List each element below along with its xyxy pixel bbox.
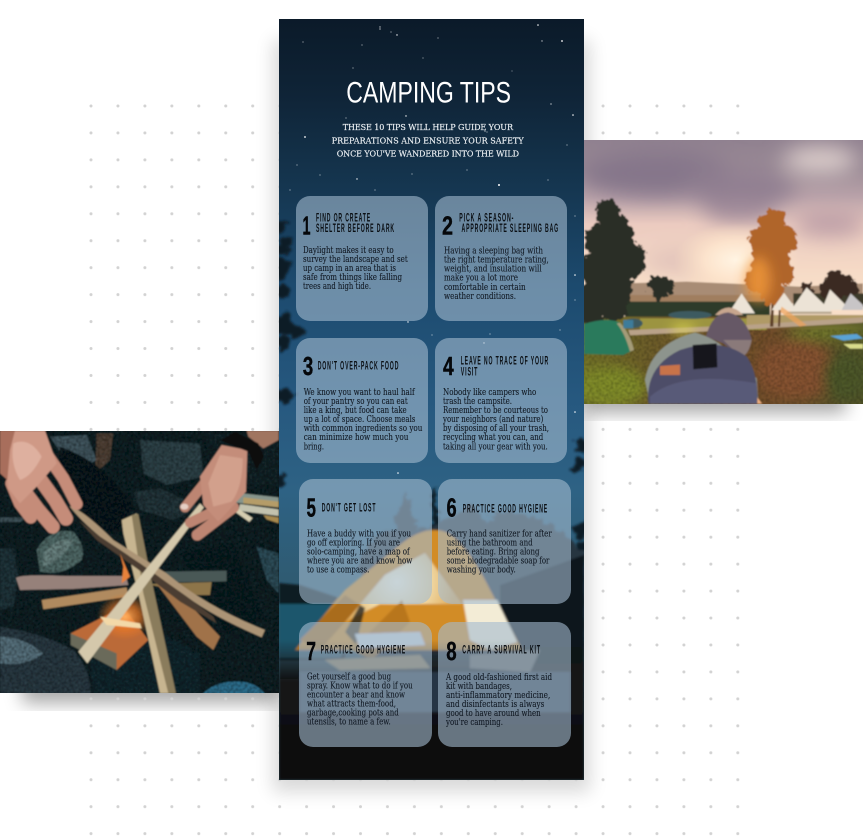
background scene: trees and lit tent: [271, 218, 590, 780]
tip card 5: to use a compass.: [307, 565, 369, 576]
tip card 1: trees and high tide.: [303, 281, 371, 292]
tip card 3: like a king, but food can take: [304, 405, 407, 416]
tip card 7: garbage,cooking pots and: [307, 708, 399, 719]
tip card 8: A good old-fashioned first aid: [445, 672, 552, 683]
tip card 5: where you are and know how: [307, 556, 412, 567]
rocks: [50, 434, 96, 464]
tip card 1: FIND OR CREATE: [316, 213, 371, 225]
tip card 2: Having a sleeping bag with: [444, 246, 543, 256]
tip card 2: [435, 196, 567, 321]
tip card 5: [299, 479, 432, 604]
tip card 3: can minimize how much you: [304, 432, 408, 443]
tip card 7: what attracts them-food,: [307, 699, 396, 710]
tip card 8: CARRY A SURVIVAL KIT: [462, 645, 541, 657]
tip card 7: [299, 622, 432, 747]
tip card 2: make you a lot more: [444, 273, 518, 284]
tip card 2: weight, and insulation will: [444, 264, 542, 275]
right hand: [185, 478, 233, 535]
sticks: [42, 587, 128, 609]
poster panel: [271, 19, 590, 780]
tip card 3: 3: [303, 351, 313, 381]
subtitle: ONCE YOU'VE WANDERED INTO THE WILD: [337, 150, 519, 159]
photo: hands building a campfire: [0, 423, 287, 700]
tip card 1: up camp in an area that is: [303, 263, 396, 274]
tip card 4: your neighbors (and nature): [442, 414, 543, 425]
tip card 8: and disinfectants is always: [446, 699, 545, 710]
tip card 5: 5: [306, 493, 316, 523]
tip card 4: Nobody like campers who: [443, 387, 537, 398]
subtitle: [332, 123, 524, 159]
tip card 4: recycling what you can, and: [443, 432, 543, 443]
text: APPROPRIATE SLEEPING BAG: [462, 223, 559, 235]
night sky background: [279, 19, 584, 780]
tip card 2: PICK A SEASON-: [459, 213, 514, 225]
tip card 6: washing your body.: [447, 565, 516, 576]
title: CAMPING TIPS: [346, 77, 511, 110]
tip card 6: before eating. Bring along: [447, 547, 539, 558]
tip card 5: Have a buddy with you if you: [307, 529, 411, 540]
tip card 3: We know you want to haul half: [304, 387, 415, 398]
tip card 4: 4: [443, 351, 454, 381]
tip card 6: 6: [446, 493, 457, 523]
dotted background grid: [78, 92, 751, 837]
tip card 3: up a lot of space. Choose meals: [304, 414, 416, 425]
tip card 1: [296, 196, 428, 321]
campsite clutter: [624, 311, 712, 328]
stars: [290, 24, 576, 474]
tip card 7: 7: [306, 636, 316, 666]
tip card 1: Daylight makes it easy to: [303, 245, 394, 256]
tip card 3: bring.: [304, 441, 324, 452]
tip card 8: kit with bandages,: [446, 681, 512, 692]
trees: [578, 200, 674, 325]
wood at right: [236, 492, 279, 508]
tip card 5: solo-camping, have a map of: [307, 547, 410, 558]
tip card 6: PRACTICE GOOD HYGIENE: [463, 504, 548, 516]
tip card 1: safe from things like falling: [303, 272, 402, 283]
left hand: [12, 457, 77, 527]
tip card 6: Carry hand sanitizer for after: [447, 529, 552, 540]
tip card 6: [438, 479, 571, 604]
tip card 7: PRACTICE GOOD HYGIENE: [321, 644, 406, 656]
tip card 1: 1: [302, 210, 310, 240]
subtitle: THESE 10 TIPS WILL HELP GUIDE YOUR: [343, 123, 514, 132]
tip card 3: of your pantry so you can eat: [304, 396, 408, 407]
tents foreground: [584, 320, 633, 355]
tip card 1: survey the landscape and set: [303, 254, 408, 265]
tip card 8: [438, 622, 571, 747]
ground reflections: [355, 632, 425, 648]
tip card 7: spray. Know what to do if you: [307, 681, 413, 692]
tip card 3: DON'T OVER-PACK FOOD: [318, 360, 399, 372]
tip card 4: taking all your gear with you.: [443, 441, 548, 452]
tip card 6: some biodegradable soap for: [447, 556, 550, 567]
tip card 2: comfortable in certain: [444, 282, 526, 293]
tip card 4: VISIT: [461, 366, 478, 378]
tip card 4: LEAVE NO TRACE OF YOUR: [461, 356, 549, 368]
hills and hedge: [623, 282, 863, 303]
tip card 8: you're camping.: [445, 717, 503, 728]
tip card 3: [296, 338, 428, 463]
tip card 7: encounter a bear and know: [307, 690, 405, 701]
tip card 4: Remember to be courteous to: [443, 405, 548, 416]
tip card 7: utensils, to name a few.: [307, 717, 391, 728]
tip card 2: 2: [442, 210, 453, 240]
tip card 4: trash the campsite.: [443, 396, 512, 407]
tip card 5: go off exploring. If you are: [307, 538, 400, 549]
ground: [580, 317, 863, 410]
tent body: [295, 530, 522, 650]
tip card 4: by disposing of all your trash,: [443, 423, 549, 434]
tip card 7: Get yourself a good bug: [307, 672, 391, 683]
tip card 8: 8: [446, 636, 457, 666]
tip card 8: anti-inflammatory medicine,: [446, 690, 550, 701]
tip card 5: DON'T GET LOST: [322, 502, 376, 514]
subtitle: PREPARATIONS AND ENSURE YOUR SAFETY: [332, 136, 524, 145]
tip card 6: using the bathroom and: [447, 538, 533, 549]
tip card 2: the right temperature rating,: [444, 254, 549, 266]
tip card 1: SHELTER BEFORE DARK: [316, 223, 395, 235]
white bell tents: [728, 287, 863, 314]
tip card 4: [435, 338, 567, 463]
tip card 2: weather conditions.: [444, 291, 516, 302]
tip card 8: good to have around when: [446, 708, 541, 719]
tip card 3: with common ingredients so you: [304, 423, 422, 434]
photo: tents at sunset: [573, 137, 863, 410]
